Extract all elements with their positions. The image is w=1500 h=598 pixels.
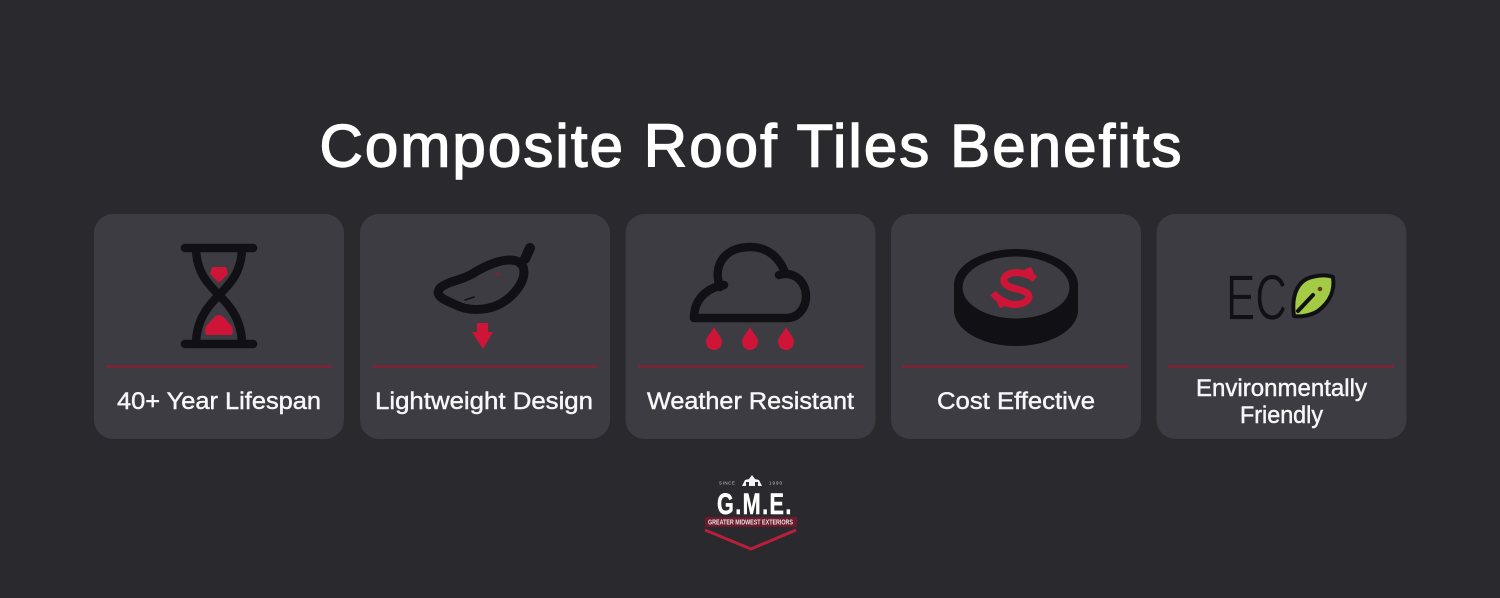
label: Lightweight Design — [375, 388, 593, 415]
panel: environmentally friendly — [1156, 214, 1406, 439]
logo wordmark: G.M.E. — [717, 486, 793, 521]
panel: weather resistant — [626, 214, 876, 439]
logo house mark — [742, 475, 762, 486]
panel: cost effective — [891, 214, 1141, 439]
icon: hourglass — [185, 248, 253, 344]
label: Weather Resistant — [647, 388, 854, 415]
panel: lightweight design — [360, 214, 610, 439]
label: 40+ Year Lifespan — [117, 388, 321, 415]
icon: feather with down arrow — [438, 248, 530, 349]
logo chevron — [705, 530, 796, 549]
logo tagline right: 1990 — [769, 480, 782, 486]
logo tagline left: SINCE — [719, 480, 735, 486]
icon: rain cloud — [694, 247, 806, 350]
title: Composite Roof Tiles Benefits — [320, 112, 1182, 180]
label line two: Friendly — [1240, 402, 1323, 429]
logo red band — [705, 517, 797, 527]
label: Cost Effective — [937, 388, 1095, 415]
logo: G.M.E. — [705, 475, 797, 549]
panel: 40+ year lifespan — [94, 214, 344, 439]
icon: eco leaf: EC — [1226, 262, 1287, 334]
logo company name: GREATER MIDWEST EXTERIORS — [708, 520, 793, 526]
icon: coin with dollar sign — [954, 249, 1078, 346]
label: Environmentally — [1196, 375, 1367, 402]
